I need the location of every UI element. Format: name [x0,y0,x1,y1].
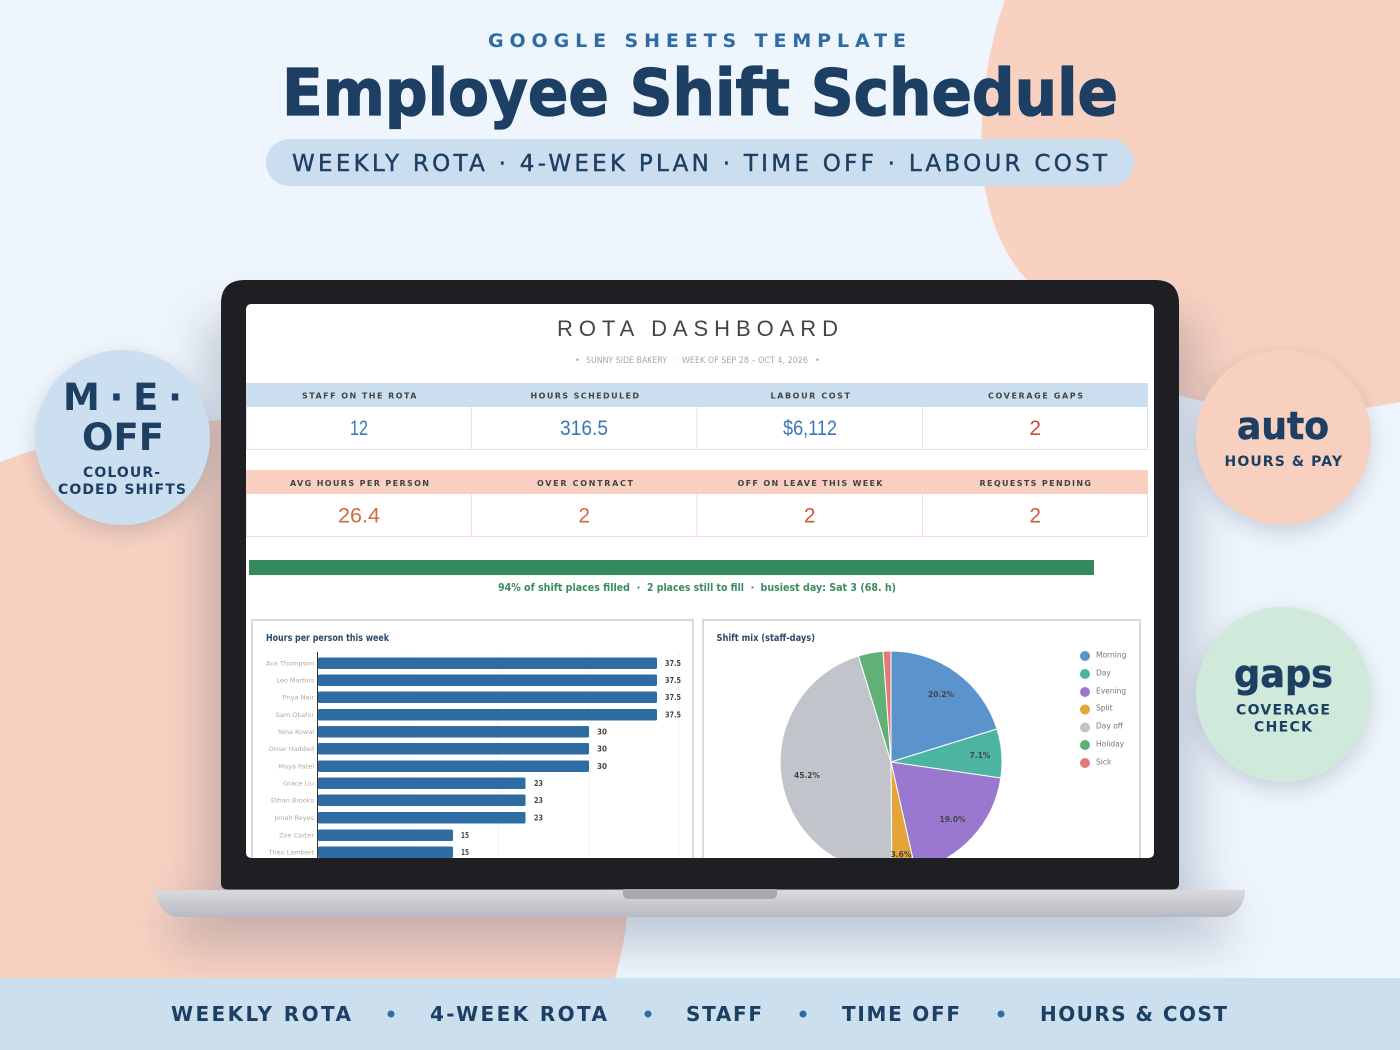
pie legend: Evening [1096,686,1126,696]
bar chart: 37.5 [665,693,681,702]
pie legend: Day off [1096,722,1124,730]
footer band: HOURS & COST [1040,1002,1227,1026]
dashboard subtitle: • [575,356,580,366]
subtitle pill [266,139,1134,186]
KPI: on leave [738,480,883,522]
bar chart [266,652,681,858]
bar chart: 23 [534,779,543,788]
KPI: over contract: OVER CONTRACT [537,479,634,488]
coverage caption: busiest day: Sat 3 (68. h) [760,582,896,594]
badge: hours and pay [1196,350,1371,531]
KPI: hours: 316.5 [560,417,608,440]
KPI: on leave: OFF ON LEAVE THIS WEEK [738,479,883,488]
KPI: average [290,480,428,522]
panel: hours per person [252,620,693,880]
KPI: cost: LABOUR COST [770,392,851,400]
coverage caption: 2 places still to fill [647,582,744,594]
pie chart [780,651,1002,873]
footer band [0,978,1400,1050]
pie legend [1080,650,1127,768]
panel heading: Shift mix (staff-days) [716,633,815,644]
badge: coverage check: gaps [1234,652,1333,696]
bar chart: Ethan Brooks [271,796,315,804]
bar chart: Theo Lambert [268,848,314,856]
bar chart: 30 [597,762,607,771]
coverage caption: 94% of shift places filled [498,582,630,594]
badge: coverage check: CHECK [1254,720,1313,736]
pie chart: 3.6% [891,850,912,859]
footer band: TIME OFF [842,1002,960,1026]
dashboard subtitle: · [673,356,676,366]
coverage caption: · [750,582,754,594]
bar chart: Omar Haddad [269,745,314,753]
badge: colour-coded shifts: OFF [82,416,164,459]
bar chart: Jonah Reyes [273,814,315,822]
dashboard title: ROTA DASHBOARD [557,316,838,341]
bar chart: Ava Thompson [266,660,314,668]
pie chart: 45.2% [794,771,820,780]
panel heading: Hours per person this week [266,633,390,644]
dashboard subtitle [576,356,819,364]
KPI: staff [302,392,416,435]
bar chart: Maya Patel [279,762,314,770]
badge: colour-coded shifts: M · E · [63,376,182,419]
bar chart: 23 [534,796,543,805]
KPI: requests [980,480,1090,522]
pie chart: 20.2% [928,690,954,699]
dashboard subtitle: • [815,356,820,366]
bar chart: Sam Okafor [276,711,314,719]
screen [246,304,1154,880]
bar chart: 15 [461,831,469,840]
footer band: 4-WEEK ROTA [430,1002,608,1026]
footer band: STAFF [686,1002,762,1026]
bar chart: 15 [461,848,469,857]
laptop notch [623,889,777,899]
badge: colour-coded shifts [35,350,210,531]
pie legend: Holiday [1096,740,1125,748]
bar chart: 30 [597,744,607,753]
pie legend: Sick [1096,758,1112,766]
KPI: cost: $6,112 [783,417,837,440]
peach shape: top right [981,0,1400,411]
laptop lid [221,280,1179,890]
peach shape: bottom left [0,420,627,978]
bar chart: Leo Martins [276,676,315,684]
dashboard subtitle: SUNNY SIDE BAKERY [586,356,668,366]
bar chart: Zoe Carter [279,832,314,840]
KPI: over contract [537,480,633,522]
footer band: WEEKLY ROTA [171,1002,352,1026]
bar chart: Grace Liu [283,780,314,788]
bar chart: Priya Nair [282,694,314,702]
laptop base [156,890,1245,917]
bar chart: 30 [597,727,607,736]
badge: colour-coded shifts: CODED SHIFTS [58,482,186,498]
coverage caption [498,583,896,593]
pie chart: 19.0% [939,815,966,824]
bar chart: Nina Kowal [278,728,314,736]
KPI: gaps [988,392,1082,435]
KPI: requests: REQUESTS PENDING [980,479,1091,488]
KPI: average: 26.4 [338,504,380,528]
badge: hours and pay: auto [1237,404,1329,448]
KPI: average: AVG HOURS PER PERSON [290,479,429,488]
pie chart: 7.1% [970,751,991,760]
pie legend: Split [1096,704,1113,712]
KPI: gaps: COVERAGE GAPS [988,392,1083,400]
badge: coverage check [1196,607,1371,788]
KPI: over contract: 2 [578,504,590,528]
bar chart: 37.5 [665,676,681,685]
panel: shift mix [703,620,1140,880]
KPI: staff: 12 [350,417,368,440]
laptop shadow [170,320,1230,945]
badge: coverage check: COVERAGE [1236,702,1330,718]
bar chart: 37.5 [665,659,681,668]
main title: Employee Shift Schedule [282,57,1118,131]
coverage caption: · [636,582,640,594]
dashboard subtitle: WEEK OF SEP 28 – OCT 4, 2026 [682,356,808,366]
title block [266,30,1134,186]
coverage progress bar [249,560,1094,575]
KPI: hours: HOURS SCHEDULED [530,392,639,400]
KPI row: peach [246,470,1148,536]
eyebrow: GOOGLE SHEETS TEMPLATE [488,30,906,52]
KPI row: blue [246,383,1148,450]
KPI: cost [770,392,851,440]
KPI: on leave: 2 [804,504,816,528]
pie legend: Day [1096,668,1111,678]
pie legend: Morning [1096,650,1127,660]
bar chart: 37.5 [665,710,681,719]
badge: colour-coded shifts: COLOUR- [83,465,160,481]
subtitle pill: WEEKLY ROTA · 4-WEEK PLAN · TIME OFF · LABOUR COST [292,151,1108,177]
badge: hours and pay: HOURS & PAY [1224,454,1343,470]
KPI: staff: STAFF ON THE ROTA [302,392,417,400]
KPI: requests: 2 [1030,504,1041,528]
KPI: gaps: 2 [1030,417,1041,440]
bar chart: 23 [534,813,543,822]
laptop [156,280,1245,917]
KPI: hours [531,392,639,435]
